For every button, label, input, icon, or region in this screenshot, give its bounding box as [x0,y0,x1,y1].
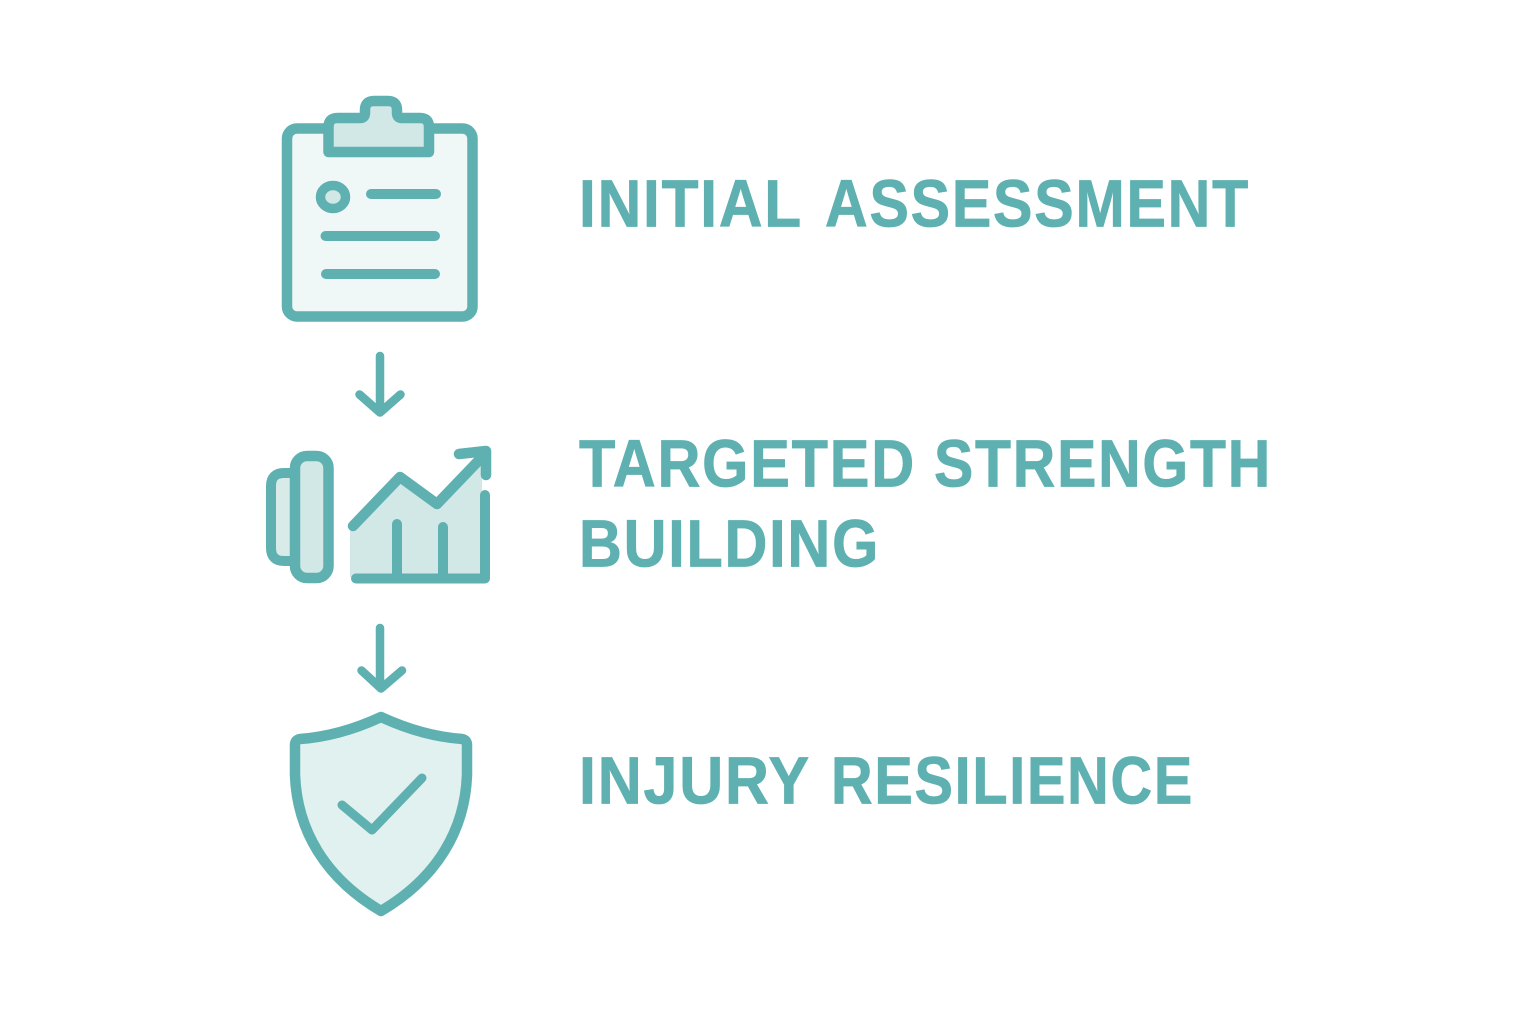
rising chart [350,451,486,578]
icon: shield with check [295,717,467,911]
icon: clipboard [287,101,472,316]
heading: initial assessment [579,166,1250,242]
heading: initial assessment: INITIAL [579,166,803,242]
heading: targeted strength building [579,426,1272,582]
arrow: strength building to resilience [362,628,402,688]
heading: targeted strength building: STRENGTH [934,426,1272,502]
heading: initial assessment: ASSESSMENT [825,166,1250,242]
heading: injury resilience: INJURY [579,744,811,818]
heading: targeted strength building: TARGETED [579,426,916,502]
heading: injury resilience: RESILIENCE [831,744,1194,818]
icon: dumbbell and rising chart [271,451,486,578]
arrow: assessment to strength building [360,356,400,412]
heading: targeted strength building: BUILDING [579,506,880,582]
dumbbell [271,456,328,578]
heading: injury resilience [579,744,1194,818]
